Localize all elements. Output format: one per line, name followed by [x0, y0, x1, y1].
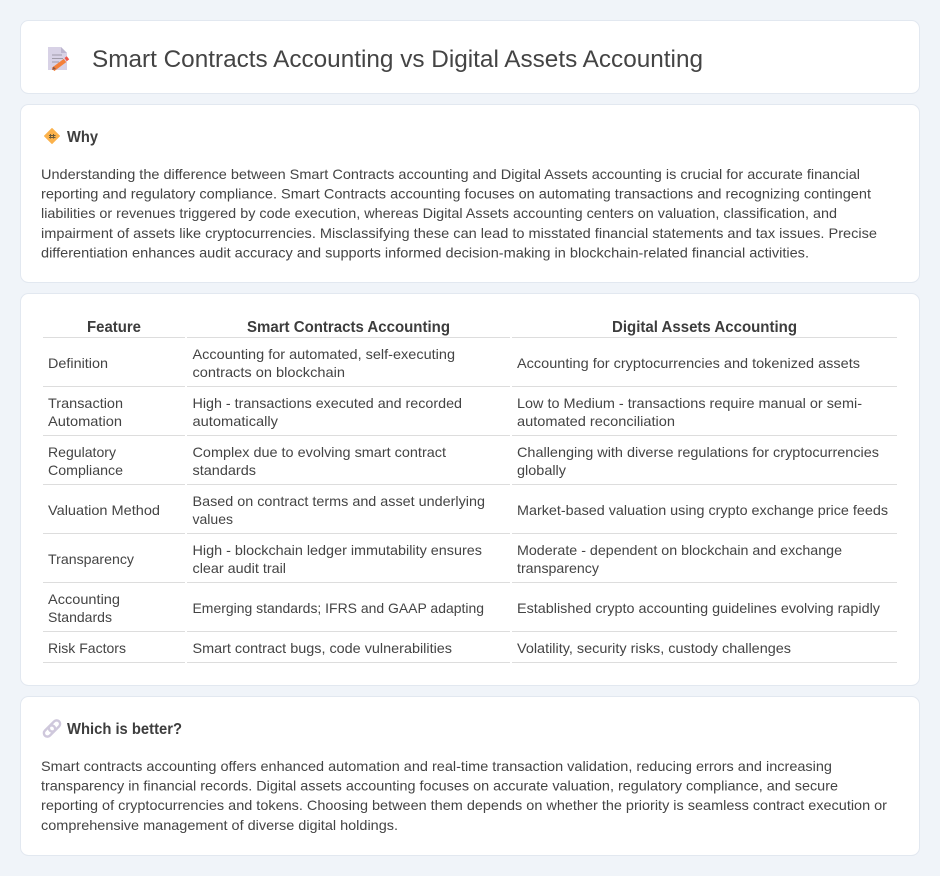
- row: valuation method: Market-based valuation using crypto exchange price feeds: [517, 502, 888, 518]
- row: transaction automation: High - transactions executed and recorded: [192, 395, 462, 411]
- row: transparency: High - blockchain ledger immutability ensures: [192, 542, 482, 558]
- text block: recommendation: reporting of cryptocurrencies and tokens. Choosing between them depends on whether the priority is seamless contract execution or: [41, 797, 887, 813]
- title: Smart Contracts Accounting vs Digital Assets Accounting: [92, 46, 703, 73]
- row: accounting standards: Established crypto accounting guidelines evolving rapidly: [517, 600, 880, 616]
- row: transparency: clear audit trail: [192, 560, 286, 576]
- row: risk factors: [48, 640, 791, 656]
- row: definition: contracts on blockchain: [192, 364, 345, 380]
- text block: why explanation: [41, 166, 877, 260]
- table header: Feature: [87, 319, 141, 336]
- row: transparency: [48, 542, 842, 576]
- text block: why explanation: differentiation enhances audit accuracy and supports informed decision-making in blockchain-related financial activities.: [41, 244, 809, 260]
- row: regulatory compliance: [48, 444, 879, 478]
- text block: recommendation: Smart contracts accounting offers enhanced automation and real-time transaction validation, reducing errors and increasing: [41, 758, 832, 774]
- panel: which is better: [20, 696, 920, 856]
- text block: why explanation: liabilities or revenues triggered by code execution, whereas Digital Assets accounting centers on valuation, classification, and: [41, 205, 837, 221]
- row: valuation method: Based on contract terms and asset underlying: [192, 493, 485, 509]
- row: valuation method: Valuation Method: [48, 502, 160, 518]
- row: regulatory compliance: globally: [517, 462, 566, 478]
- table header: Smart Contracts Accounting: [247, 319, 450, 336]
- panel: comparison table: [20, 294, 920, 686]
- icon: warning diamond: [44, 128, 60, 144]
- row: risk factors: Risk Factors: [48, 640, 126, 656]
- row: transaction automation: Low to Medium - transactions require manual or semi-: [517, 395, 862, 411]
- row: accounting standards: [48, 591, 880, 625]
- text block: recommendation: transparency in financial records. Digital assets accounting focuses on accurate valuation, regulatory compliance, and secure: [41, 778, 838, 794]
- heading: why: Why: [67, 129, 98, 146]
- row: risk factors: Volatility, security risks, custody challenges: [517, 640, 791, 656]
- row: regulatory compliance: Regulatory: [48, 444, 116, 460]
- row: transaction automation: Transaction: [48, 395, 123, 411]
- text block: why explanation: Understanding the difference between Smart Contracts accounting and Digital Assets accounting is crucial for accurate financial: [41, 166, 860, 182]
- table header: Digital Assets Accounting: [612, 319, 797, 336]
- table header: [87, 319, 797, 336]
- text block: why explanation: reporting and regulatory compliance. Smart Contracts accounting focuses on automating transactions and recognizing contingent: [41, 186, 871, 202]
- row: transaction automation: automated reconciliation: [517, 413, 675, 429]
- row: transparency: Moderate - dependent on blockchain and exchange: [517, 542, 842, 558]
- panel: why: [20, 104, 920, 282]
- text block: recommendation: comprehensive management of diverse digital holdings.: [41, 817, 398, 833]
- row: transparency: transparency: [517, 560, 599, 576]
- row: transaction automation: Automation: [48, 413, 122, 429]
- row: accounting standards: Accounting: [48, 591, 120, 607]
- row: risk factors: Smart contract bugs, code vulnerabilities: [192, 640, 452, 656]
- icon: document with pencil: [48, 47, 69, 70]
- row: definition: Accounting for cryptocurrencies and tokenized assets: [517, 355, 860, 371]
- row: transaction automation: automatically: [192, 413, 278, 429]
- row: accounting standards: Emerging standards; IFRS and GAAP adapting: [192, 600, 484, 616]
- row: transparency: Transparency: [48, 551, 134, 567]
- row: regulatory compliance: Complex due to evolving smart contract: [192, 444, 446, 460]
- row: definition: [48, 346, 860, 380]
- row: valuation method: [48, 493, 888, 527]
- row: definition: Definition: [48, 355, 108, 371]
- heading: which is better: Which is better?: [67, 721, 182, 738]
- text block: recommendation: [41, 758, 887, 833]
- row: definition: Accounting for automated, self-executing: [192, 346, 455, 362]
- panel: title card: [20, 20, 920, 94]
- text block: why explanation: impairment of assets like cryptocurrencies. Misclassifying these can lead to misstated financial statements and tax issues. Precise: [41, 225, 877, 241]
- icon: chain link: [42, 719, 62, 738]
- row: valuation method: values: [192, 511, 233, 527]
- row: accounting standards: Standards: [48, 609, 112, 625]
- row: regulatory compliance: Challenging with diverse regulations for cryptocurrencies: [517, 444, 879, 460]
- row: transaction automation: [48, 395, 862, 429]
- row: regulatory compliance: standards: [192, 462, 256, 478]
- row: regulatory compliance: Compliance: [48, 462, 123, 478]
